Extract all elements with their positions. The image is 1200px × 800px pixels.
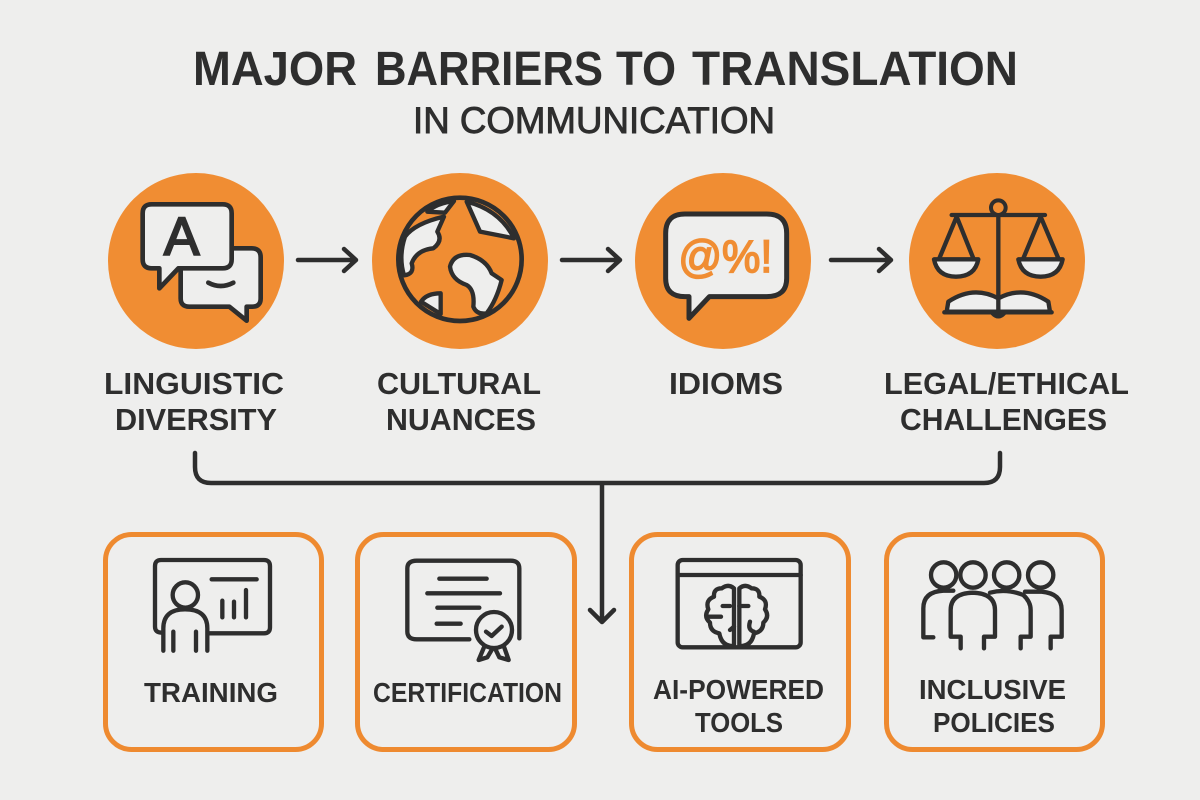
icon: certificate with seal: [407, 561, 519, 660]
title: TO: [616, 43, 676, 96]
barrier: cultural nuances: [372, 173, 548, 437]
title: MAJOR: [193, 43, 357, 96]
label: ai-powered tools: [653, 674, 824, 738]
barrier: linguistic diversity: [104, 173, 284, 437]
label: idioms: IDIOMS: [669, 366, 783, 401]
label: legal/ethical challenges: CHALLENGES: [900, 402, 1107, 437]
icon: scales and book: [909, 173, 1085, 349]
icon: speech bubble with symbols: [635, 173, 811, 349]
label: legal/ethical challenges: [884, 366, 1129, 437]
panel: certification: [358, 534, 574, 750]
icon: browser window with brain: [678, 560, 801, 647]
label: ai-powered tools: AI-POWERED: [653, 674, 824, 705]
icon: group of people: [923, 562, 1062, 648]
subtitle: IN COMMUNICATION: [413, 100, 775, 141]
label: training: TRAINING: [144, 677, 278, 708]
icon: presenter at board: [155, 560, 270, 651]
icon: speech bubbles: A: [164, 208, 200, 267]
label: cultural nuances: [377, 366, 541, 437]
icon: speech bubbles: [108, 173, 284, 349]
icon: globe: [372, 173, 548, 349]
label: cultural nuances: CULTURAL: [377, 366, 541, 401]
label: inclusive policies: INCLUSIVE: [919, 674, 1066, 705]
panel: ai-powered tools: [632, 534, 848, 750]
label: linguistic diversity: DIVERSITY: [115, 402, 277, 437]
icon: speech bubble with symbols: @%!: [678, 231, 772, 282]
label: certification: CERTIFICATION: [373, 677, 562, 708]
title: TRANSLATION: [692, 43, 1018, 96]
panel: inclusive policies: [886, 534, 1102, 750]
panel: training: [106, 534, 322, 750]
arrow: linguistic to cultural: [298, 249, 356, 271]
arrow: idioms to legal: [831, 249, 891, 271]
arrow: cultural to idioms: [562, 249, 620, 271]
label: legal/ethical challenges: LEGAL/ETHICAL: [884, 366, 1129, 401]
label: ai-powered tools: TOOLS: [695, 707, 783, 738]
label: inclusive policies: POLICIES: [933, 707, 1055, 738]
title: [193, 43, 1018, 141]
label: linguistic diversity: [104, 366, 284, 437]
title: BARRIERS: [375, 43, 603, 96]
barrier: legal and ethical challenges: [884, 173, 1129, 437]
label: linguistic diversity: LINGUISTIC: [104, 366, 284, 401]
connector bracket and down arrow: [195, 453, 1000, 622]
barrier: idioms: [635, 173, 811, 401]
label: inclusive policies: [919, 674, 1066, 738]
label: cultural nuances: NUANCES: [386, 402, 536, 437]
